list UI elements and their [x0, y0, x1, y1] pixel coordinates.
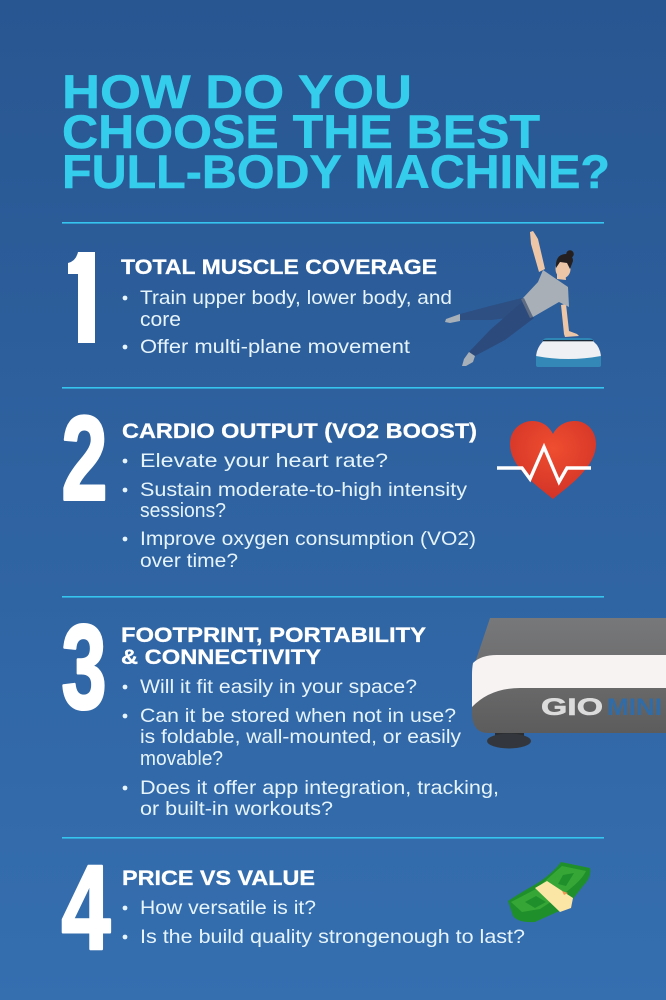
number 1 — [68, 252, 95, 343]
machine logo — [541, 694, 662, 721]
bullet list 1: Offer multi-plane movement — [140, 336, 411, 358]
bullet list 3: movable? — [140, 747, 223, 770]
title: CHOOSE THE BEST — [62, 105, 540, 158]
panel: price vs value — [62, 841, 590, 975]
heading: total muscle coverage: TOTAL MUSCLE COVERAGE — [121, 256, 437, 279]
bullet list 4 — [123, 897, 525, 948]
icon: GIO mini machine — [472, 618, 666, 748]
bullet list 4: How versatile is it? — [140, 897, 316, 919]
bullet list 1 — [123, 287, 452, 358]
heading: price vs value: PRICE VS VALUE — [122, 867, 315, 890]
number 3: 3 — [62, 600, 106, 734]
bullet list 3: is foldable, wall-mounted, or easily — [140, 726, 461, 748]
bullet list 2: over time? — [140, 550, 238, 572]
bullet list 3: Does it offer app integration, tracking, — [140, 777, 499, 799]
bullet list 2: Elevate your heart rate? — [140, 450, 388, 472]
bullet list 4: Is the build quality strongenough to last? — [140, 926, 525, 948]
bullet list 2: Sustain moderate-to-high intensity — [140, 479, 467, 501]
panel: cardio output — [62, 392, 596, 572]
bullet list 3: or built-in workouts? — [140, 798, 333, 820]
title: HOW DO YOU — [62, 65, 412, 118]
heading: footprint, portability and connectivity — [121, 624, 426, 669]
number 2: 2 — [62, 392, 108, 526]
title: FULL-BODY MACHINE? — [62, 145, 610, 198]
bullet list 2: Improve oxygen consumption (VO2) — [140, 528, 476, 550]
title — [62, 65, 610, 198]
machine logo: MINI — [607, 694, 662, 721]
heading: footprint, portability and connectivity: FOOTPRINT, PORTABILITY — [121, 624, 426, 647]
machine logo: GIO — [541, 694, 603, 721]
panel: total muscle coverage: 1 — [72, 233, 98, 367]
icon: heart with pulse — [497, 421, 596, 499]
heading: footprint, portability and connectivity: & CONNECTIVITY — [121, 646, 321, 669]
icon: woman doing side plank on platform — [445, 231, 601, 367]
panel: footprint, portability and connectivity — [62, 600, 666, 820]
panel: total muscle coverage — [68, 231, 601, 367]
bullet list 1: Train upper body, lower body, and — [140, 287, 452, 309]
bullet list 3: Will it fit easily in your space? — [140, 676, 417, 698]
heading: cardio output: CARDIO OUTPUT (VO2 BOOST) — [122, 420, 477, 443]
bullet list 3: Can it be stored when not in use? — [140, 705, 456, 727]
icon: stack of money — [508, 862, 590, 922]
bullet list 1: core — [140, 308, 181, 331]
number 4: 4 — [62, 841, 111, 975]
bullet list 2 — [123, 450, 476, 572]
bullet list 3 — [123, 676, 499, 820]
bullet list 2: sessions? — [140, 499, 226, 522]
